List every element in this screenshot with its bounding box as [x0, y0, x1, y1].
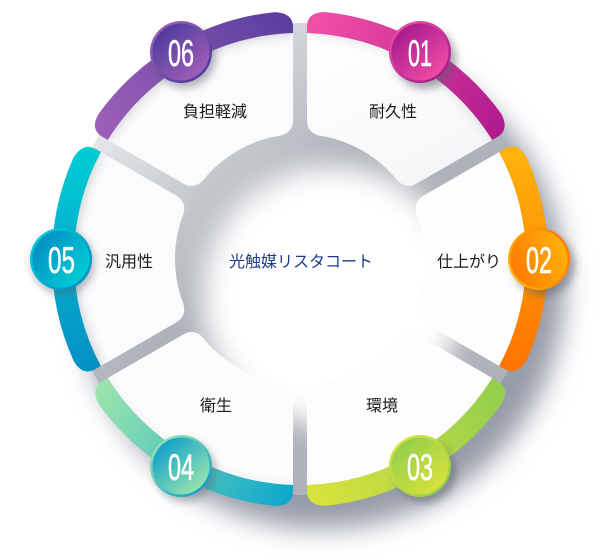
panel 04: [108, 332, 293, 485]
label: 仕上がり: 仕上がり: [437, 253, 501, 271]
segment 03: [261, 302, 510, 560]
band 05: [0, 141, 193, 376]
badge 01: 01: [408, 33, 432, 74]
panel 03: [267, 302, 492, 538]
centre title: 光触媒リスタコート: [229, 253, 373, 271]
label: 衛生: 衛生: [200, 397, 232, 415]
badge 02: [508, 228, 575, 296]
white centre glow: [202, 166, 462, 426]
badge 04: [150, 435, 216, 502]
segment 02: [367, 142, 600, 400]
segment 06: [94, 12, 294, 186]
badge 06: 06: [168, 33, 194, 74]
badge 05: [30, 228, 95, 295]
segment 04: [95, 332, 293, 506]
label: 汎用性: 汎用性: [105, 253, 153, 271]
outer drop shadow: [79, 43, 565, 529]
panel 01: [307, 33, 492, 186]
panel 06: [108, 0, 333, 216]
band 04: [95, 378, 293, 506]
segment 05: [54, 146, 184, 372]
badge 05: 05: [48, 240, 75, 281]
band 03: [301, 325, 510, 560]
badge 03: [389, 435, 456, 503]
label: 耐久性: 耐久性: [369, 103, 417, 121]
grey gaps disc: [64, 23, 536, 495]
badge 06: [150, 21, 216, 88]
badge 04: 04: [168, 447, 194, 488]
band 01: [307, 12, 505, 140]
badge 03: 03: [407, 447, 433, 488]
label: 環境: 環境: [366, 397, 398, 415]
band 06: [90, 0, 299, 193]
band 02: [407, 142, 600, 377]
badge 01: [389, 21, 456, 89]
panel 05: [8, 129, 233, 366]
panel 02: [367, 152, 592, 389]
badge 02: 02: [526, 240, 552, 281]
segment 01: [307, 12, 505, 186]
label: 負担軽減: 負担軽減: [183, 103, 247, 121]
